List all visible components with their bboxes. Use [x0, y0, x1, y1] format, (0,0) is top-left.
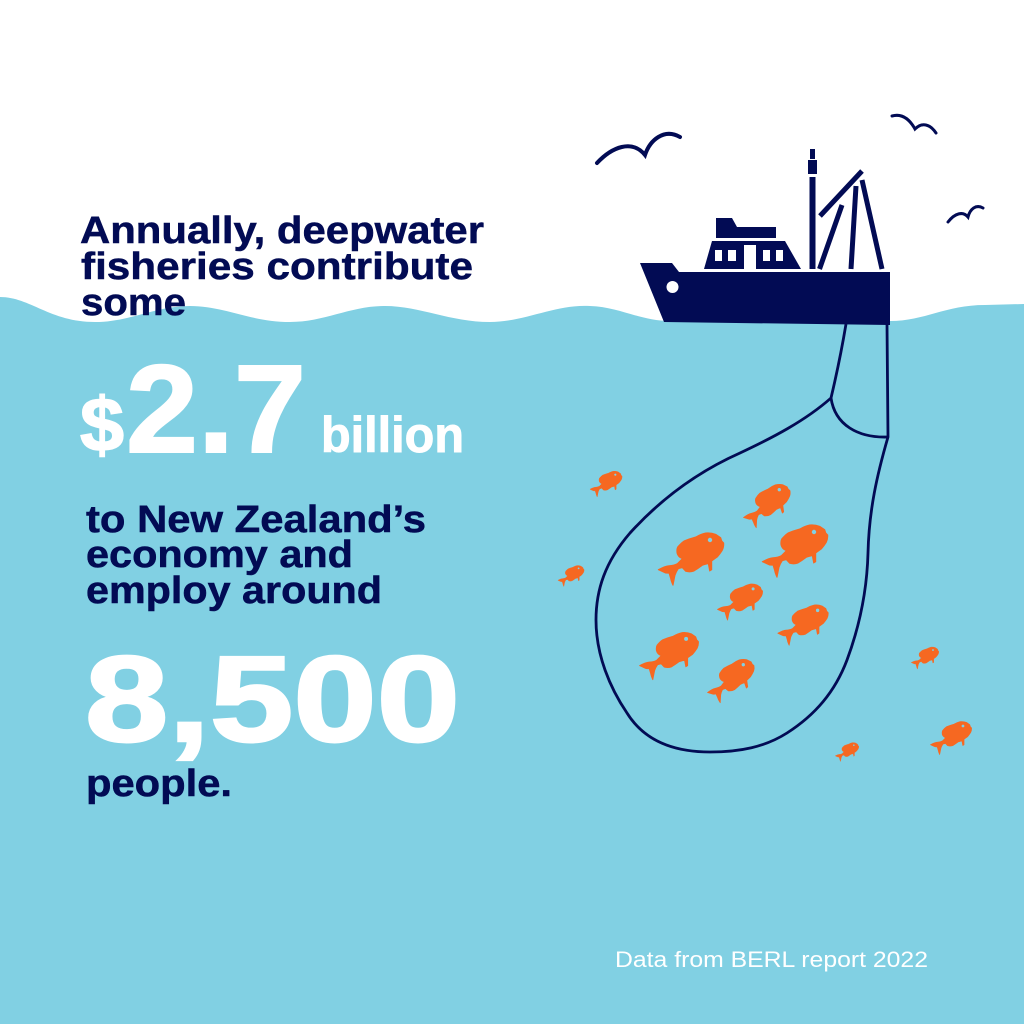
fish outside net — [558, 471, 972, 761]
text: people: people. — [86, 763, 232, 805]
boat wheelhouse — [716, 218, 776, 238]
text: economy and employment: to New Zealand’s — [86, 499, 426, 541]
heading: annual contribution: Annually, deepwater — [80, 210, 484, 252]
icon: birds — [597, 115, 983, 222]
statistic: $2.7 billion: $ — [80, 383, 124, 468]
heading: annual contribution: fisheries contribute — [81, 246, 473, 288]
heading: annual contribution — [80, 210, 484, 324]
statistic: $2.7 billion: billion — [321, 407, 464, 463]
boat hull — [640, 263, 890, 325]
icon: fishing boat — [640, 149, 890, 325]
statistic: $2.7 billion — [80, 340, 464, 479]
sea with waves — [0, 297, 1024, 1024]
text: economy and employment: economy and — [86, 534, 353, 576]
fish inside net — [640, 483, 828, 704]
statistic: 8,500: 8,500 — [85, 631, 460, 767]
source note: Data from BERL report 2022 — [615, 947, 928, 972]
text: economy and employment: employ around — [86, 570, 382, 612]
fishing net — [596, 324, 888, 752]
text: economy and employment — [86, 499, 426, 612]
boat cabin — [704, 241, 801, 269]
heading: annual contribution: some — [81, 282, 186, 324]
statistic: $2.7 billion: 2.7 — [126, 340, 306, 479]
boat mast and rigging — [808, 149, 882, 269]
